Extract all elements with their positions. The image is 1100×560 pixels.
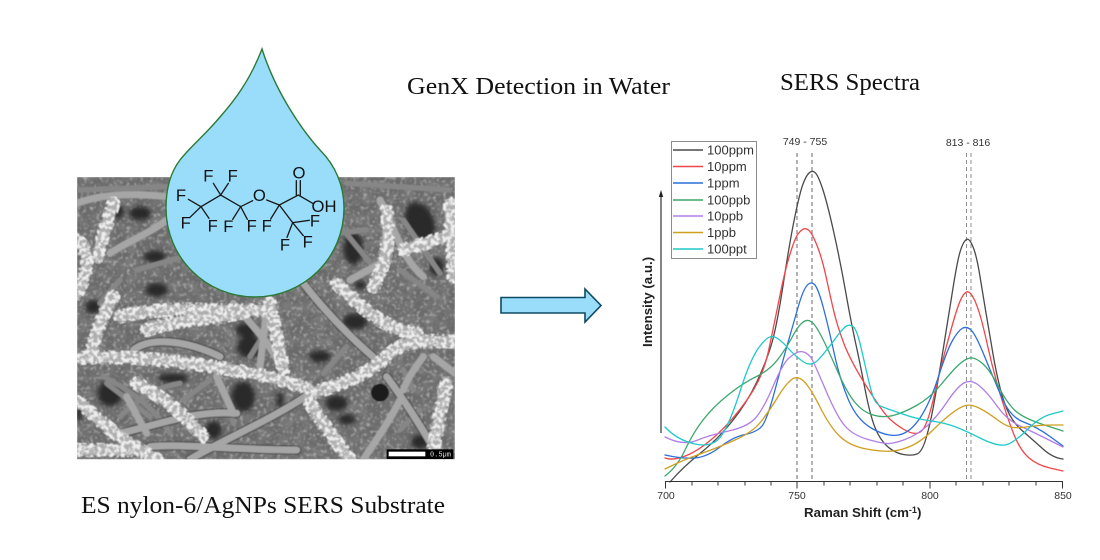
SEM micrograph of ES nylon-6/AgNPs substrate bbox=[76, 177, 455, 460]
GenX molecular structure: F bbox=[208, 217, 218, 236]
y axis title: Intensity (a.u.) bbox=[640, 257, 655, 347]
legend: 1ppb bbox=[707, 225, 736, 240]
GenX molecular structure: F bbox=[181, 214, 191, 233]
spectra title: SERS Spectra bbox=[780, 70, 920, 96]
SERS line chart bbox=[640, 136, 1072, 520]
GenX molecular structure: F bbox=[247, 217, 257, 236]
legend: 10ppb bbox=[707, 208, 743, 224]
peak range labels: 813 - 816 bbox=[946, 137, 990, 149]
curve: 1ppm bbox=[665, 283, 1063, 458]
peak guide lines bbox=[797, 153, 971, 482]
legend: 100ppt bbox=[707, 242, 747, 256]
x axis with ticks bbox=[665, 482, 1063, 488]
GenX molecular structure: O bbox=[293, 163, 306, 182]
x axis tick labels: 750 bbox=[788, 490, 806, 502]
GenX molecular structure: F bbox=[228, 167, 238, 186]
scale bar bbox=[387, 449, 453, 460]
scale bar: 0.5µm bbox=[430, 452, 451, 460]
GenX molecular structure: F bbox=[223, 217, 233, 236]
x axis tick labels bbox=[657, 490, 1072, 502]
curve: 100ppb bbox=[665, 320, 1063, 476]
GenX molecular structure bbox=[176, 163, 336, 255]
x axis tick labels: 800 bbox=[921, 490, 939, 502]
x axis title: Raman Shift (cm bbox=[804, 505, 909, 520]
water drop bbox=[166, 49, 344, 297]
GenX molecular structure: OH bbox=[312, 197, 336, 216]
curve: 10ppb bbox=[665, 352, 1063, 447]
substrate caption: ES nylon-6/AgNPs SERS Substrate bbox=[81, 493, 445, 519]
x axis tick labels: 700 bbox=[657, 490, 675, 502]
peak range labels: 749 - 755 bbox=[783, 136, 827, 148]
legend: 100ppb bbox=[707, 192, 750, 208]
peak range labels bbox=[783, 136, 990, 149]
legend: 10ppm bbox=[707, 159, 747, 174]
x axis title: -1 bbox=[909, 505, 917, 515]
curve: 10ppm bbox=[665, 229, 1063, 471]
legend: 100ppm bbox=[707, 142, 754, 158]
GenX molecular structure: F bbox=[303, 232, 313, 251]
legend: 1ppm bbox=[707, 176, 740, 190]
GenX molecular structure: F bbox=[262, 217, 272, 236]
x axis title: ) bbox=[917, 505, 921, 520]
GenX molecular structure: F bbox=[176, 186, 186, 205]
main title: GenX Detection in Water bbox=[407, 74, 670, 100]
curve: 100ppm bbox=[670, 171, 1063, 482]
y axis arrow bbox=[659, 190, 663, 433]
GenX molecular structure: O bbox=[253, 186, 266, 205]
GenX molecular structure: F bbox=[310, 211, 320, 230]
arrow bbox=[501, 289, 601, 322]
GenX molecular structure: F bbox=[203, 167, 213, 186]
legend bbox=[672, 142, 756, 258]
curve: 1ppb bbox=[665, 378, 1063, 469]
GenX molecular structure: F bbox=[280, 236, 290, 255]
x axis tick labels: 850 bbox=[1054, 490, 1072, 502]
curve: 100ppt bbox=[665, 325, 1063, 445]
